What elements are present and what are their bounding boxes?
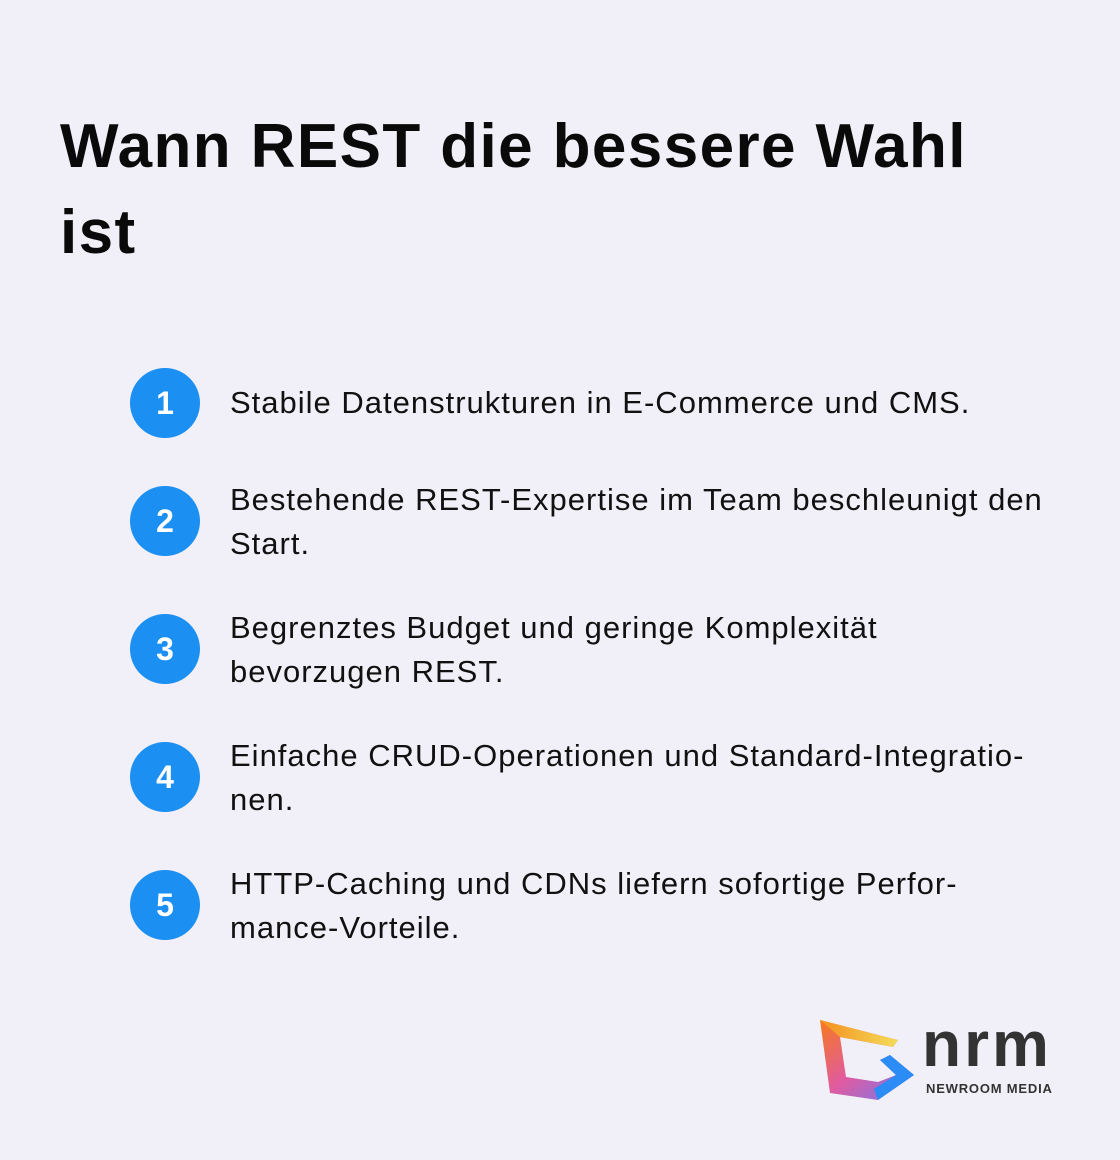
item 2 [130, 482, 1043, 561]
item 2: Bestehende REST-Expertise im Team beschleunigt den [230, 482, 1043, 517]
item 2: 2 [156, 503, 174, 539]
title [60, 112, 967, 267]
item 4: 4 [156, 759, 174, 795]
item 1: 1 [156, 385, 174, 421]
item 3: Begrenztes Budget und geringe Komplexität [230, 610, 878, 645]
title: ist [60, 198, 137, 267]
item 1: Stabile Datenstrukturen in E-Commerce und CMS. [230, 385, 970, 420]
logo text: nrm [922, 1008, 1052, 1080]
item 4: Einfache CRUD-Operationen und Standard-Integratio- [230, 738, 1024, 773]
item 5 [130, 866, 958, 945]
item 5: mance-Vorteile. [230, 910, 460, 945]
title: Wann REST die bessere Wahl [60, 112, 967, 181]
item 3 [130, 610, 878, 689]
logo: NEWROOM MEDIA [926, 1081, 1053, 1096]
logo [820, 1008, 1053, 1100]
item 5: HTTP-Caching und CDNs liefern sofortige Perfor- [230, 866, 958, 901]
item 5: 5 [156, 887, 174, 923]
item 3: bevorzugen REST. [230, 654, 504, 689]
item 2: Start. [230, 526, 310, 561]
item 1 [130, 368, 970, 438]
icon: logo mark [820, 1020, 914, 1100]
item 4 [130, 738, 1024, 817]
item 4: nen. [230, 782, 294, 817]
item 3: 3 [156, 631, 174, 667]
